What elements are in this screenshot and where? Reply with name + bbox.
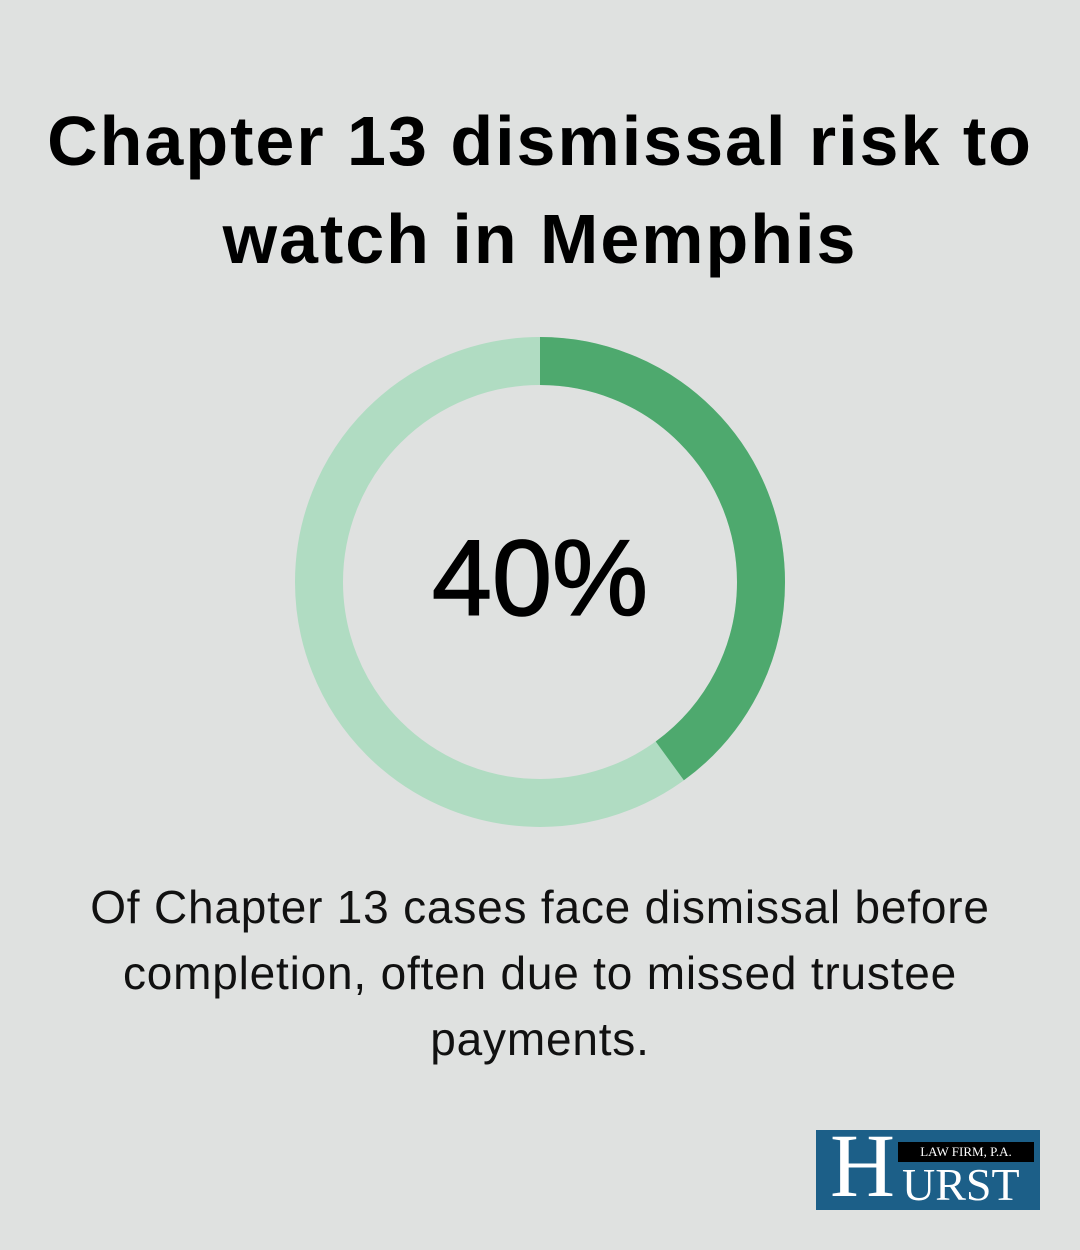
description: Of Chapter 13 cases face dismissal before bbox=[90, 881, 990, 933]
logo: LAW FIRM, P.A. bbox=[920, 1144, 1012, 1159]
donut chart: 40% bbox=[432, 517, 648, 638]
logo: URST bbox=[902, 1159, 1020, 1210]
title: watch in Memphis bbox=[223, 200, 857, 278]
description: completion, often due to missed trustee bbox=[123, 947, 957, 999]
title: Chapter 13 dismissal risk to bbox=[47, 102, 1033, 180]
description: payments. bbox=[430, 1013, 650, 1065]
logo bbox=[816, 1130, 1040, 1210]
title bbox=[47, 102, 1033, 278]
description bbox=[90, 881, 990, 1065]
